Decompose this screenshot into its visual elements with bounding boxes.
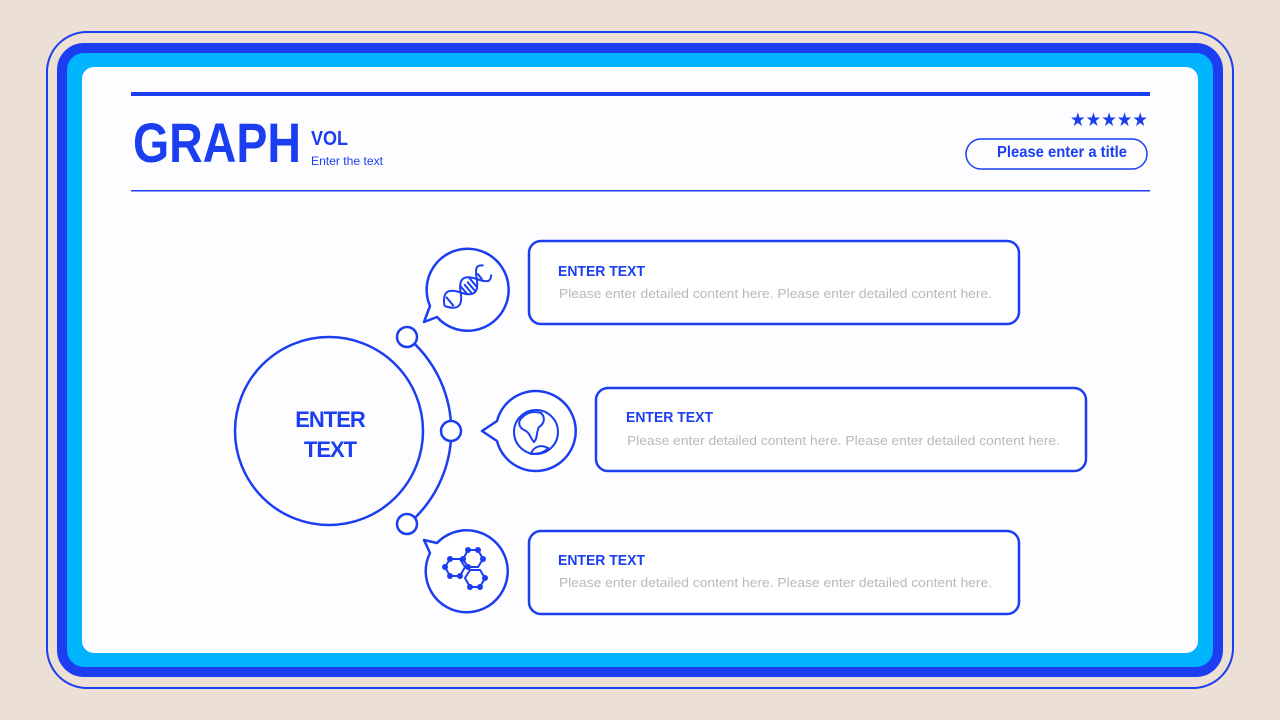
box 2: Please enter detailed content here. Please enter detailed content here. — [627, 433, 1060, 448]
box 3: ENTER TEXT — [558, 552, 645, 569]
box 2: ENTER TEXT — [626, 409, 713, 426]
icon: globe bubble — [482, 391, 576, 471]
box 1: Please enter detailed content here. Please enter detailed content here. — [559, 286, 992, 301]
center circle: TEXT — [304, 437, 358, 462]
arc with nodes — [397, 327, 461, 534]
title: VOL — [311, 128, 348, 150]
title: Enter the text — [311, 154, 384, 168]
title pill: Please enter a title — [997, 144, 1127, 161]
center circle: ENTER — [295, 407, 366, 432]
header rules — [131, 92, 1150, 192]
box 2 — [596, 388, 1086, 471]
center circle — [235, 337, 423, 525]
box 1 — [529, 241, 1019, 324]
icon: molecule bubble — [424, 530, 508, 612]
title pill — [966, 139, 1147, 169]
title: GRAPH — [133, 111, 301, 174]
icon: dna bubble — [424, 249, 509, 331]
box 3: Please enter detailed content here. Please enter detailed content here. — [559, 575, 992, 590]
stars: ★★★★★ — [1070, 110, 1148, 131]
box 1: ENTER TEXT — [558, 263, 645, 280]
box 3 — [529, 531, 1019, 614]
